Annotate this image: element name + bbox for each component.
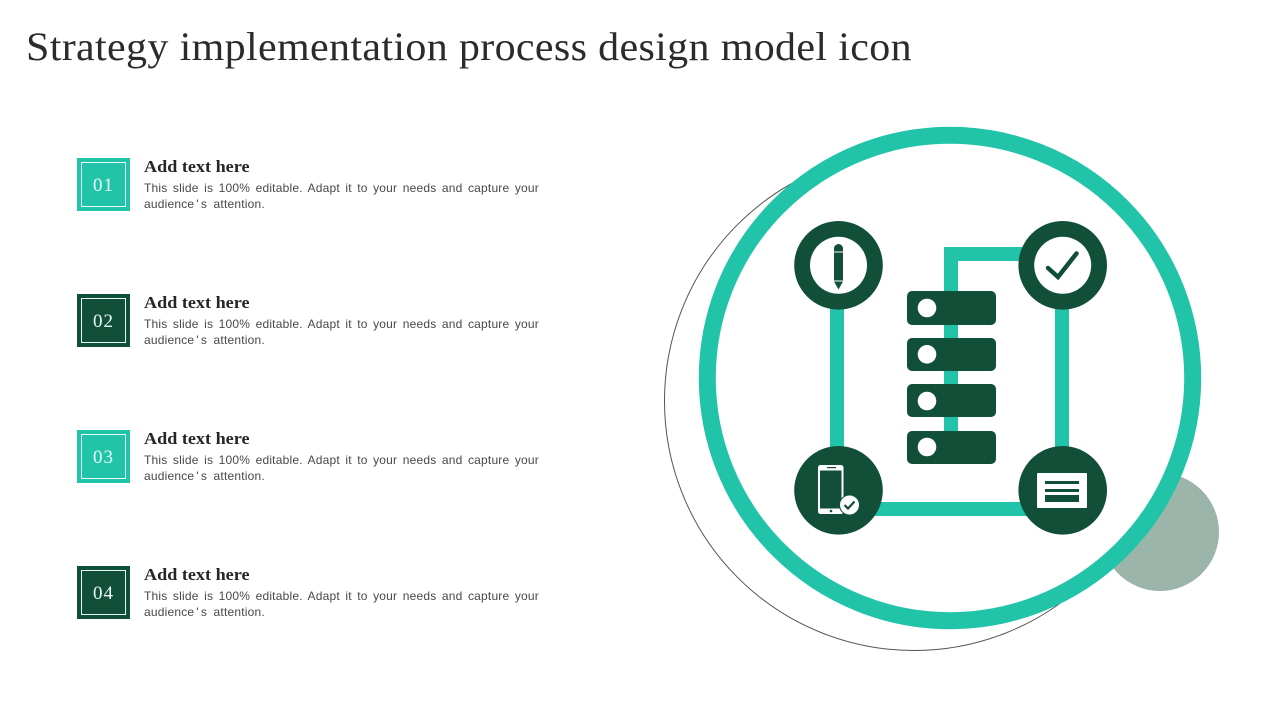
server stack — [907, 291, 996, 464]
main teal ring — [707, 135, 1193, 621]
badge 03 — [77, 430, 130, 483]
icon: document card — [1018, 446, 1107, 535]
item 04 — [77, 565, 539, 619]
text 01: This slide is 100% editable. Adapt it to your needs and capture your audience's attention. — [144, 181, 539, 211]
icon: pencil — [794, 221, 883, 310]
badge 04: 04 — [93, 583, 114, 604]
item 01 — [77, 157, 539, 211]
badge 02 — [77, 294, 130, 347]
connector lines — [837, 254, 1062, 509]
text 03: This slide is 100% editable. Adapt it to your needs and capture your audience's attention. — [144, 453, 539, 483]
thin outline circle — [664, 152, 1164, 650]
badge 03: 03 — [93, 447, 114, 468]
badge 01: 01 — [93, 175, 114, 196]
badge 02: 02 — [93, 311, 114, 332]
icon: check mark — [1018, 221, 1107, 310]
item 02 — [77, 293, 539, 347]
heading 04: Add text here — [144, 565, 250, 584]
text 02: This slide is 100% editable. Adapt it to your needs and capture your audience's attention. — [144, 317, 539, 347]
item 03 — [77, 429, 539, 483]
badge 01 — [77, 158, 130, 211]
heading 02: Add text here — [144, 293, 250, 312]
text 04: This slide is 100% editable. Adapt it to your needs and capture your audience's attention. — [144, 589, 539, 619]
badge 04 — [77, 566, 130, 619]
heading 01: Add text here — [144, 157, 250, 176]
grey accent circle — [1101, 473, 1219, 591]
icon: phone with check — [794, 446, 883, 535]
heading 03: Add text here — [144, 429, 250, 448]
title: Strategy implementation process design model icon — [26, 24, 912, 69]
